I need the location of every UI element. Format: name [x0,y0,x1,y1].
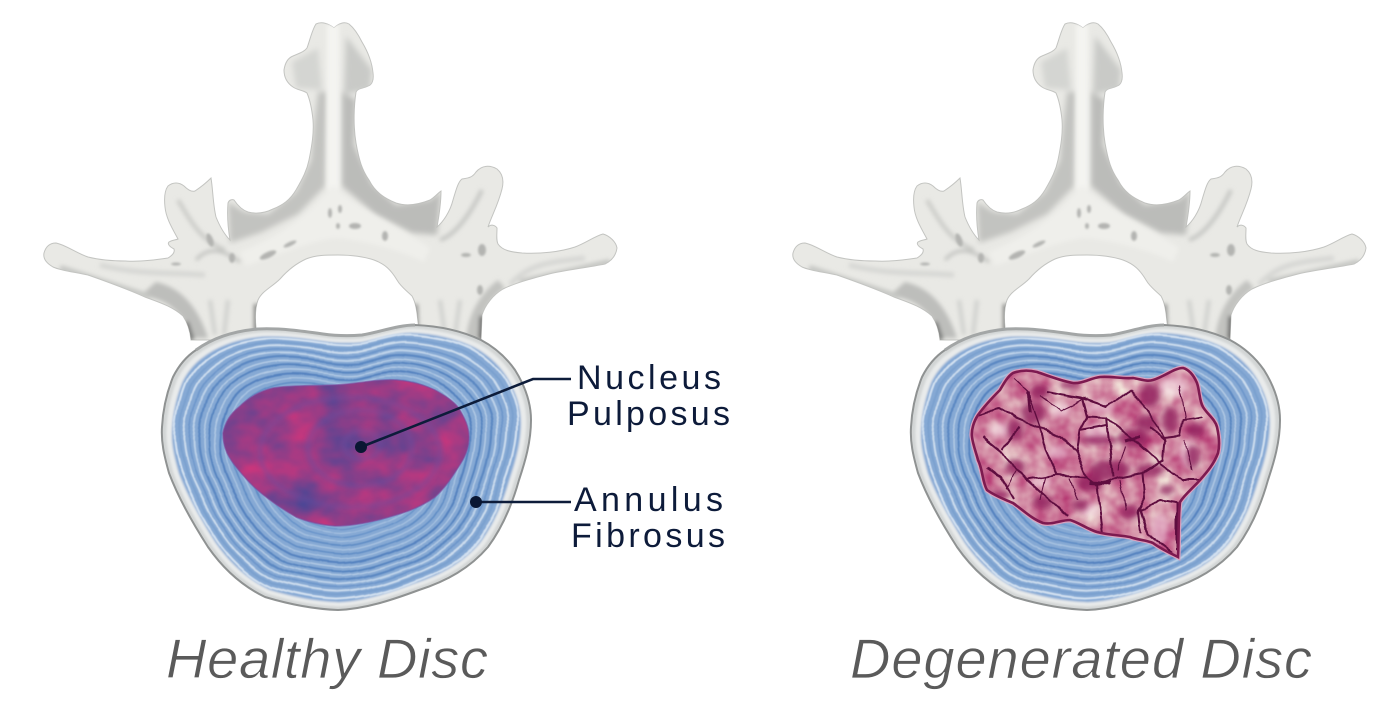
callout: annulus line [476,501,571,503]
callout: nucleus dot [355,441,367,453]
callout: nucleus line [361,379,571,447]
annulus disc [162,325,531,610]
panel: degenerated disc [793,23,1366,690]
vertebra bone [44,23,617,340]
cracks [978,378,1203,553]
panel: healthy disc [44,23,730,690]
title: healthy disc: Healthy Disc [166,627,488,690]
label: nucleus pulposus: Nucleus [577,359,721,397]
label: annulus fibrosus: Annulus [574,481,723,519]
vertebra bone [793,23,1366,340]
annulus disc [911,325,1280,610]
callout: annulus dot [470,496,482,508]
label: nucleus pulposus [567,359,730,433]
nucleus pulposus, healthy [223,380,469,526]
label: nucleus pulposus: Pulposus [567,395,730,433]
label: annulus fibrosus: Fibrosus [571,517,725,555]
title: degenerated disc: Degenerated Disc [850,627,1312,690]
nucleus, degenerated [972,368,1219,557]
label: annulus fibrosus [571,481,725,555]
